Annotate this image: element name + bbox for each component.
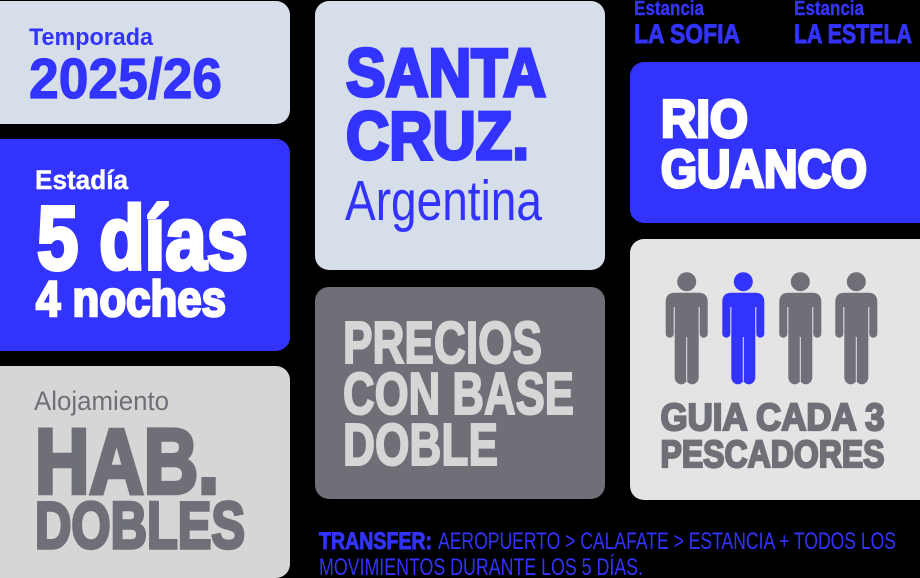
text: pescadores: PESCADORES bbox=[660, 434, 884, 476]
panel: rio guanco bbox=[630, 62, 920, 223]
label: estancia la sofia bbox=[634, 0, 740, 49]
value: 4 noches: 4 noches bbox=[36, 271, 226, 327]
text: guia cada 3: GUIA CADA 3 bbox=[660, 397, 884, 439]
icon: person 2 guide bbox=[722, 272, 764, 384]
panel: santa cruz bbox=[315, 1, 605, 270]
label: estancia la estela bbox=[794, 0, 912, 49]
icon: person 3 bbox=[779, 272, 821, 384]
subheading: argentina: Argentina bbox=[345, 169, 542, 233]
icon: person 1 bbox=[666, 272, 708, 384]
panel: alojamiento bbox=[0, 366, 290, 578]
label: estancia la sofia: LA SOFIA bbox=[634, 19, 740, 49]
text: transfer note bbox=[319, 528, 896, 578]
value: 5 dias: 5 días bbox=[37, 189, 248, 289]
label: estadia: Estadía bbox=[35, 165, 129, 195]
panel: precios bbox=[315, 287, 605, 499]
label: temporada: Temporada bbox=[29, 24, 154, 51]
label: alojamiento: Alojamiento bbox=[34, 386, 169, 416]
value: 2025/26: 2025/26 bbox=[29, 47, 222, 111]
heading: cruz: CRUZ. bbox=[346, 98, 529, 174]
value: dobles: DOBLES bbox=[35, 488, 245, 562]
text: precios: PRECIOS bbox=[343, 310, 542, 376]
heading: santa: SANTA bbox=[346, 35, 546, 111]
text: guanco: GUANCO bbox=[661, 140, 867, 199]
icon: person 4 bbox=[835, 272, 877, 384]
value: hab.: HAB. bbox=[35, 411, 219, 513]
text: doble: DOBLE bbox=[343, 412, 498, 478]
text: con base: CON BASE bbox=[343, 361, 574, 427]
text: transfer note: TRANSFER: bbox=[319, 528, 432, 555]
text: rio: RIO bbox=[661, 90, 748, 149]
panel: estadia bbox=[0, 139, 290, 351]
panel: guia bbox=[630, 239, 920, 500]
panel: temporada bbox=[0, 1, 290, 124]
